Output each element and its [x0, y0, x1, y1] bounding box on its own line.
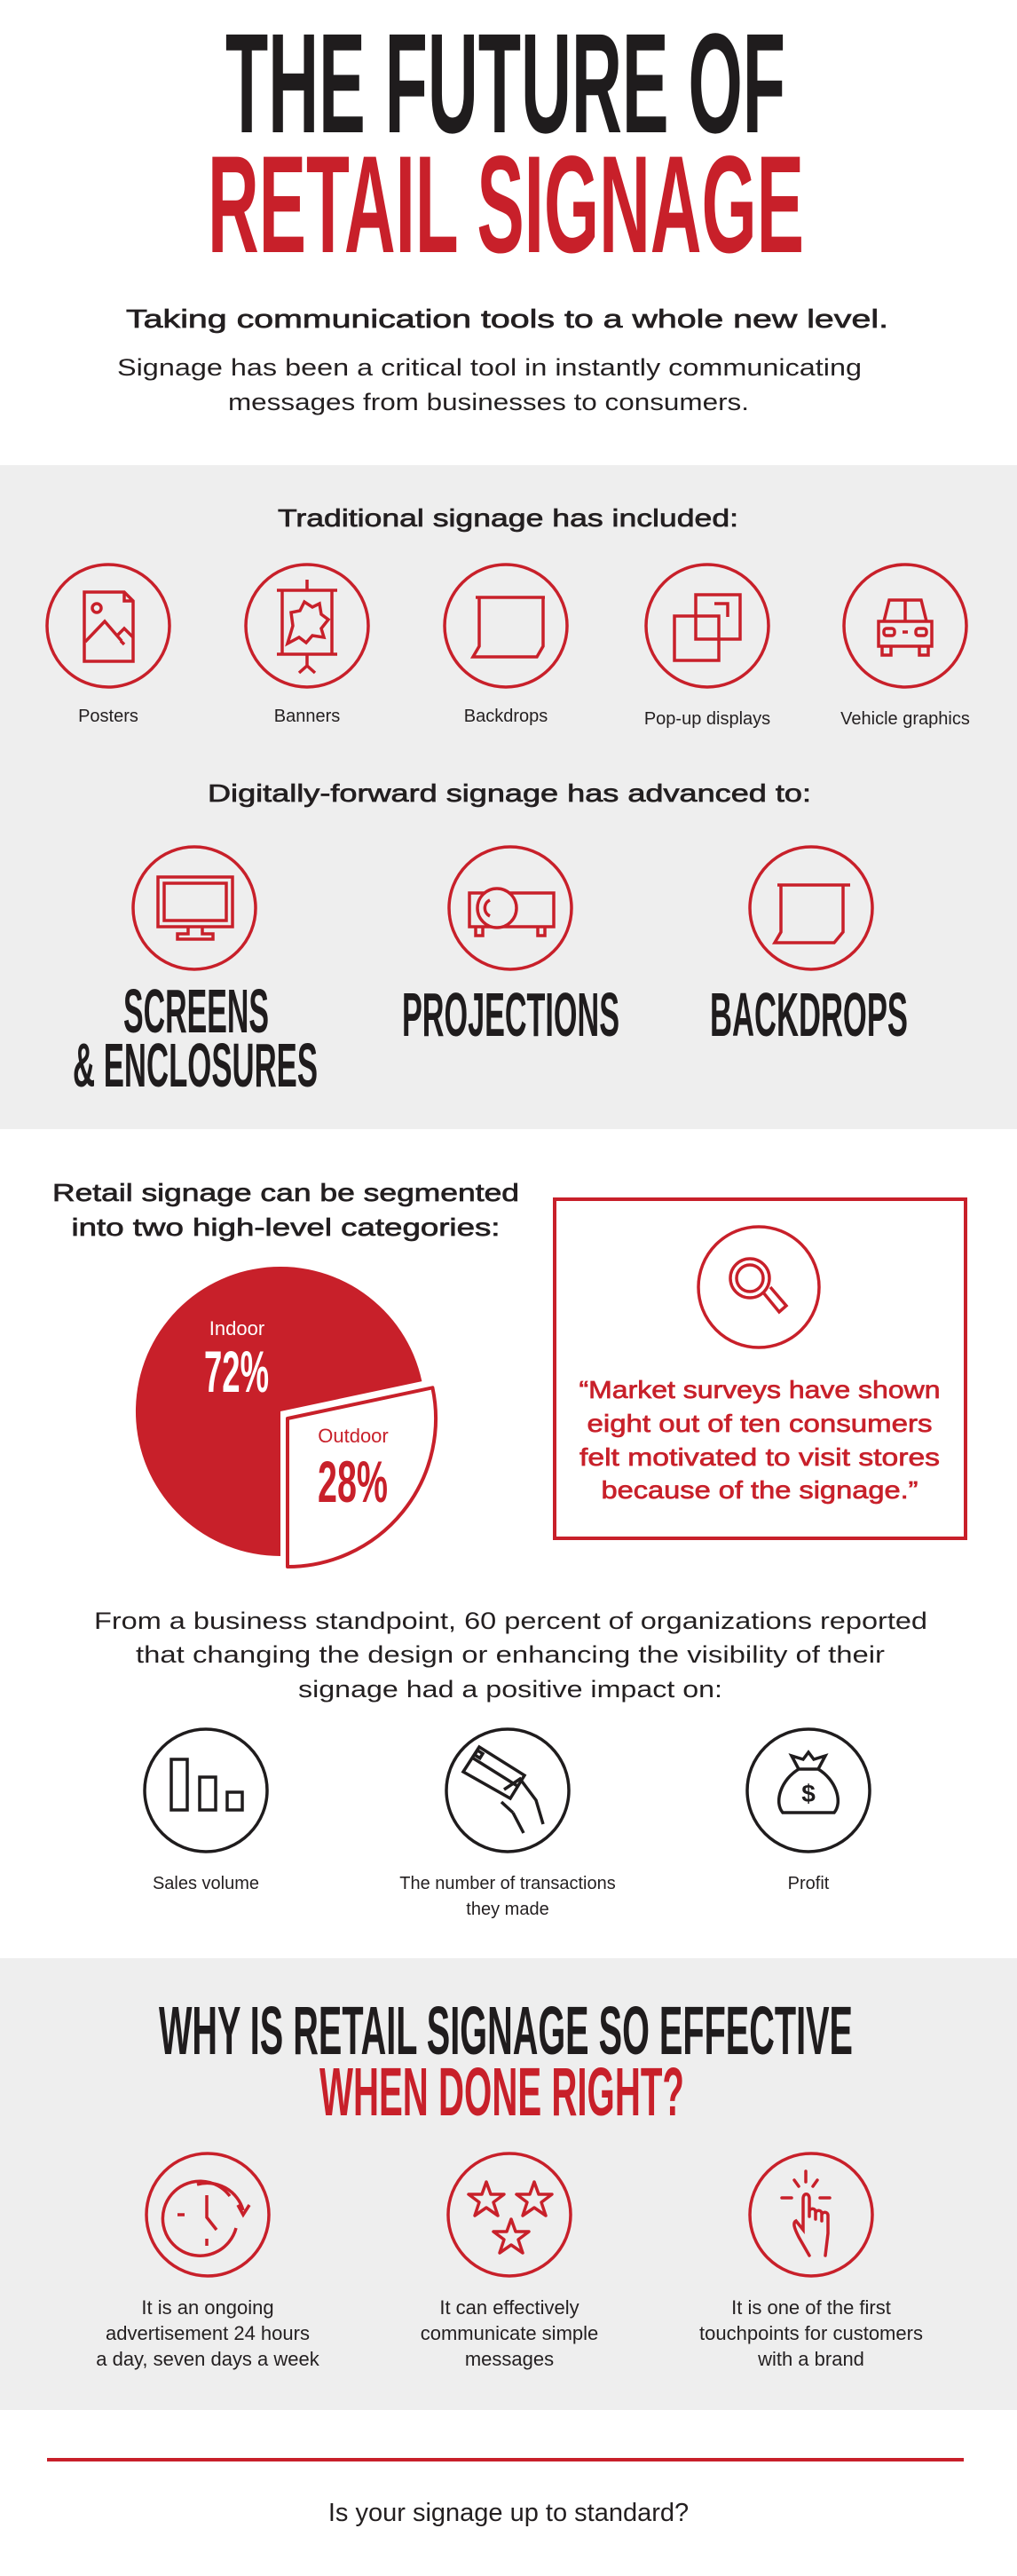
- icon: sales volume: [145, 1729, 267, 1852]
- icon: projections: [449, 847, 572, 969]
- label: pop-up displays: Pop-up displays: [644, 709, 770, 729]
- label: screens & enclosures: [73, 976, 318, 1100]
- text: ongoing: It is an ongoing: [141, 2296, 274, 2319]
- text: first touchpoints: touchpoints for customers: [699, 2322, 923, 2344]
- label: profit: Profit: [788, 1874, 830, 1893]
- text: business standpoint: that changing the design or enhancing the visibility of their: [136, 1641, 885, 1668]
- heading: traditional: Traditional signage has included:: [278, 504, 738, 532]
- text: business standpoint: [94, 1608, 927, 1703]
- text: simple messages: [421, 2296, 598, 2370]
- label: sales volume: Sales volume: [153, 1874, 259, 1893]
- icon: backdrops: [750, 847, 872, 969]
- label: screens & enclosures: SCREENS: [123, 976, 269, 1046]
- icon: magnifier: [698, 1227, 819, 1347]
- text: simple messages: communicate simple: [421, 2322, 598, 2344]
- text: business standpoint: From a business standpoint, 60 percent of organizations reported: [94, 1608, 927, 1634]
- callout: quote: because of the signage.”: [602, 1476, 918, 1504]
- icon: pop-up displays: [646, 565, 769, 687]
- pie chart: 72%: [204, 1339, 269, 1404]
- icon: posters: [47, 565, 170, 687]
- title: [208, 4, 804, 282]
- text: ongoing: advertisement 24 hours: [106, 2322, 310, 2344]
- text: they made: [466, 1900, 549, 1919]
- heading: digitally-forward: Digitally-forward signage has advanced to:: [208, 779, 811, 807]
- icon: clock: [146, 2153, 269, 2276]
- pie chart: Outdoor: [318, 1425, 389, 1447]
- panel: why effective: [0, 1958, 1017, 2410]
- icon: profit: $: [801, 1780, 816, 1807]
- callout: quote: felt motivated to visit stores: [579, 1443, 940, 1471]
- icon: banners: [246, 565, 368, 687]
- text: simple messages: It can effectively: [439, 2296, 579, 2319]
- text: first touchpoints: It is one of the first: [731, 2296, 891, 2319]
- label: backdrops: Backdrops: [464, 707, 548, 726]
- callout: quote: [555, 1199, 966, 1538]
- icon: stars: [448, 2153, 571, 2276]
- text: first touchpoints: [699, 2296, 923, 2370]
- heading: segmentation: [52, 1179, 519, 1241]
- text: ongoing: a day, seven days a week: [96, 2348, 320, 2370]
- label: transactions: The number of transactions: [399, 1874, 616, 1893]
- intro text: messages from businesses to consumers.: [228, 389, 749, 415]
- text: ongoing: [96, 2296, 320, 2370]
- text: first touchpoints: with a brand: [757, 2348, 864, 2370]
- icon: touch: [750, 2153, 872, 2276]
- heading: segmentation: into two high-level categories:: [71, 1213, 501, 1241]
- callout: quote: eight out of ten consumers: [587, 1410, 932, 1437]
- label: posters: Posters: [78, 707, 138, 726]
- panel: signage types: PROJECTIONS: [402, 980, 619, 1049]
- pie chart: Indoor: [209, 1317, 264, 1339]
- slice: outdoor: [288, 1387, 436, 1567]
- icon: transactions: [446, 1729, 569, 1852]
- label: vehicle graphics: Vehicle graphics: [840, 709, 970, 729]
- pie chart: [136, 1267, 436, 1567]
- panel: signage types: & ENCLOSURES: [73, 1031, 318, 1100]
- subtitle: Taking communication tools to a whole new level.: [126, 305, 888, 334]
- closing question: Is your signage up to standard?: [328, 2499, 689, 2527]
- callout: quote: “Market surveys have shown: [579, 1376, 941, 1403]
- intro text: [117, 354, 862, 415]
- text: simple messages: messages: [465, 2348, 554, 2370]
- heading: segmentation: Retail signage can be segmented: [52, 1179, 519, 1206]
- text: business standpoint: signage had a positive impact on:: [298, 1676, 722, 1703]
- intro text: Signage has been a critical tool in instantly communicating: [117, 354, 862, 381]
- label: banners: Banners: [274, 707, 340, 726]
- pie chart: 28%: [318, 1449, 388, 1514]
- icon: profit: [747, 1729, 870, 1852]
- icon: screens: [133, 847, 256, 969]
- icon: backdrops: [445, 565, 567, 687]
- icon: vehicle graphics: [844, 565, 966, 687]
- slice: indoor: [136, 1267, 422, 1556]
- panel: why effective: WHEN DONE RIGHT?: [319, 2054, 684, 2130]
- panel: signage types: [0, 465, 1017, 1129]
